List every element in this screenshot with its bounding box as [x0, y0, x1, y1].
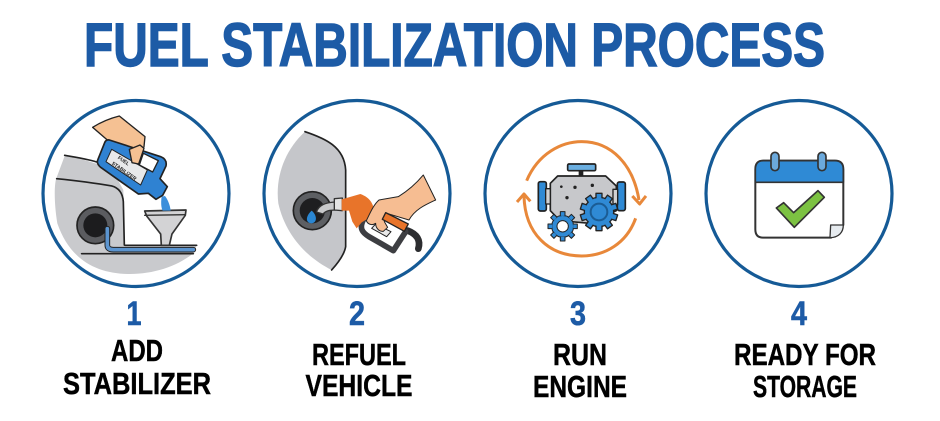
label: refuel vehicle: VEHICLE — [306, 368, 412, 403]
step 4: ready for storage — [706, 100, 892, 286]
icon: pouring stabilizer into funnel: FUEL — [116, 155, 130, 167]
icon: hose — [408, 231, 419, 249]
label: refuel vehicle — [306, 337, 412, 403]
step numbers: 3 — [570, 295, 586, 333]
icon: calendar with check mark — [755, 152, 843, 238]
label: run engine: ENGINE — [533, 369, 627, 404]
step numbers: 1 — [126, 295, 142, 333]
icon: pouring stabilizer into funnel — [55, 116, 197, 274]
label: add stabilizer: STABILIZER — [63, 366, 211, 401]
icon: pouring stabilizer into funnel: STABILIZER — [110, 161, 138, 182]
icon: engine with cycle arrows — [517, 142, 646, 256]
icon: fuel nozzle in filler neck — [278, 132, 436, 270]
label: run engine — [533, 337, 627, 404]
label: add stabilizer — [63, 333, 211, 401]
label: ready for storage: READY FOR — [734, 337, 876, 372]
step numbers — [126, 295, 807, 333]
step 1: add stabilizer — [43, 100, 229, 286]
label: refuel vehicle: REFUEL — [312, 337, 406, 372]
step numbers: 2 — [349, 295, 365, 333]
circle: step 1 — [43, 100, 229, 286]
circle: step 2 — [264, 100, 450, 286]
label: run engine: RUN — [553, 337, 607, 372]
step 2: refuel vehicle — [264, 100, 450, 286]
label: add stabilizer: ADD — [111, 333, 163, 368]
step 3: run engine — [485, 100, 671, 286]
step numbers: 4 — [791, 295, 807, 333]
icon: hand — [366, 175, 436, 231]
label: ready for storage: STORAGE — [753, 369, 857, 404]
circle: step 3 — [485, 100, 671, 286]
circle: step 4 — [706, 100, 892, 286]
icon: small gear — [548, 212, 577, 241]
label: ready for storage — [734, 337, 876, 404]
icon: large gear — [580, 193, 618, 231]
